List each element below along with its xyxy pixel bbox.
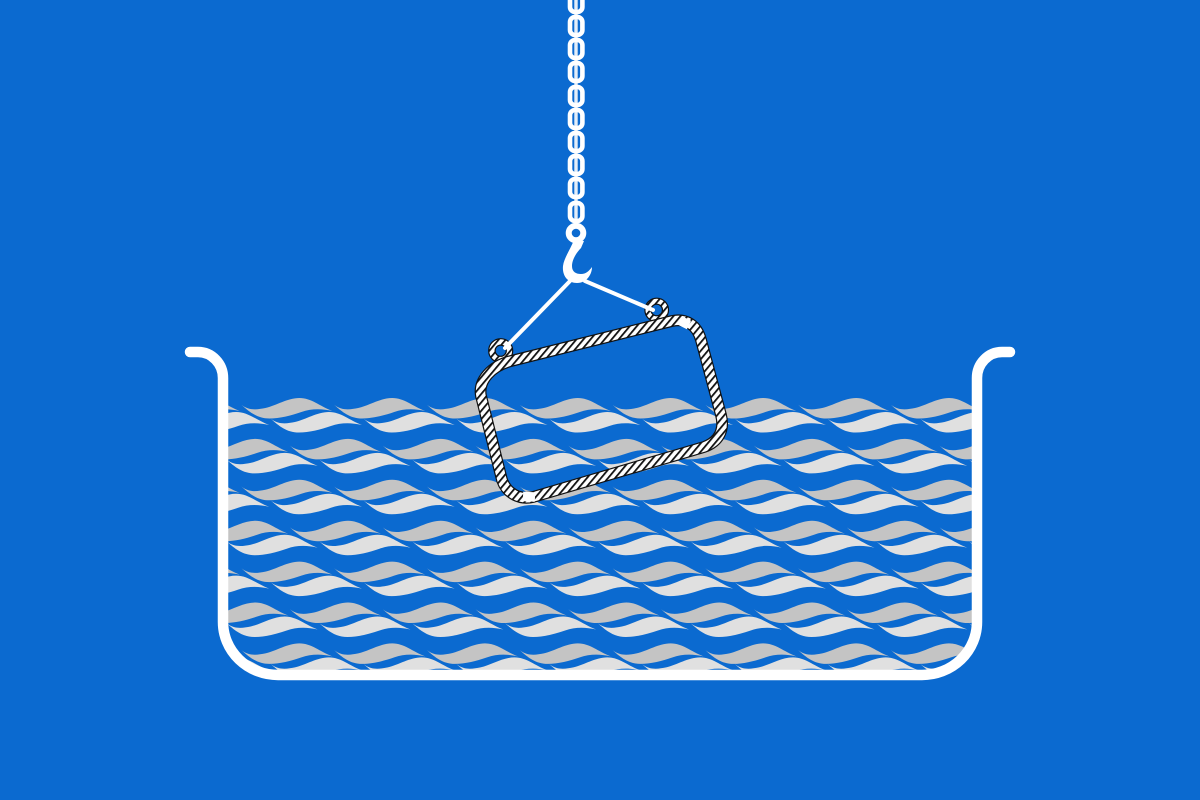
chain	[570, 0, 582, 226]
water waves	[228, 398, 972, 670]
hook	[563, 226, 592, 283]
tank outline	[190, 352, 1010, 675]
rope body	[481, 320, 722, 498]
rope splices	[523, 320, 689, 497]
lifting frame	[481, 301, 722, 498]
eye rings	[492, 301, 666, 360]
lifting slings	[505, 280, 653, 348]
